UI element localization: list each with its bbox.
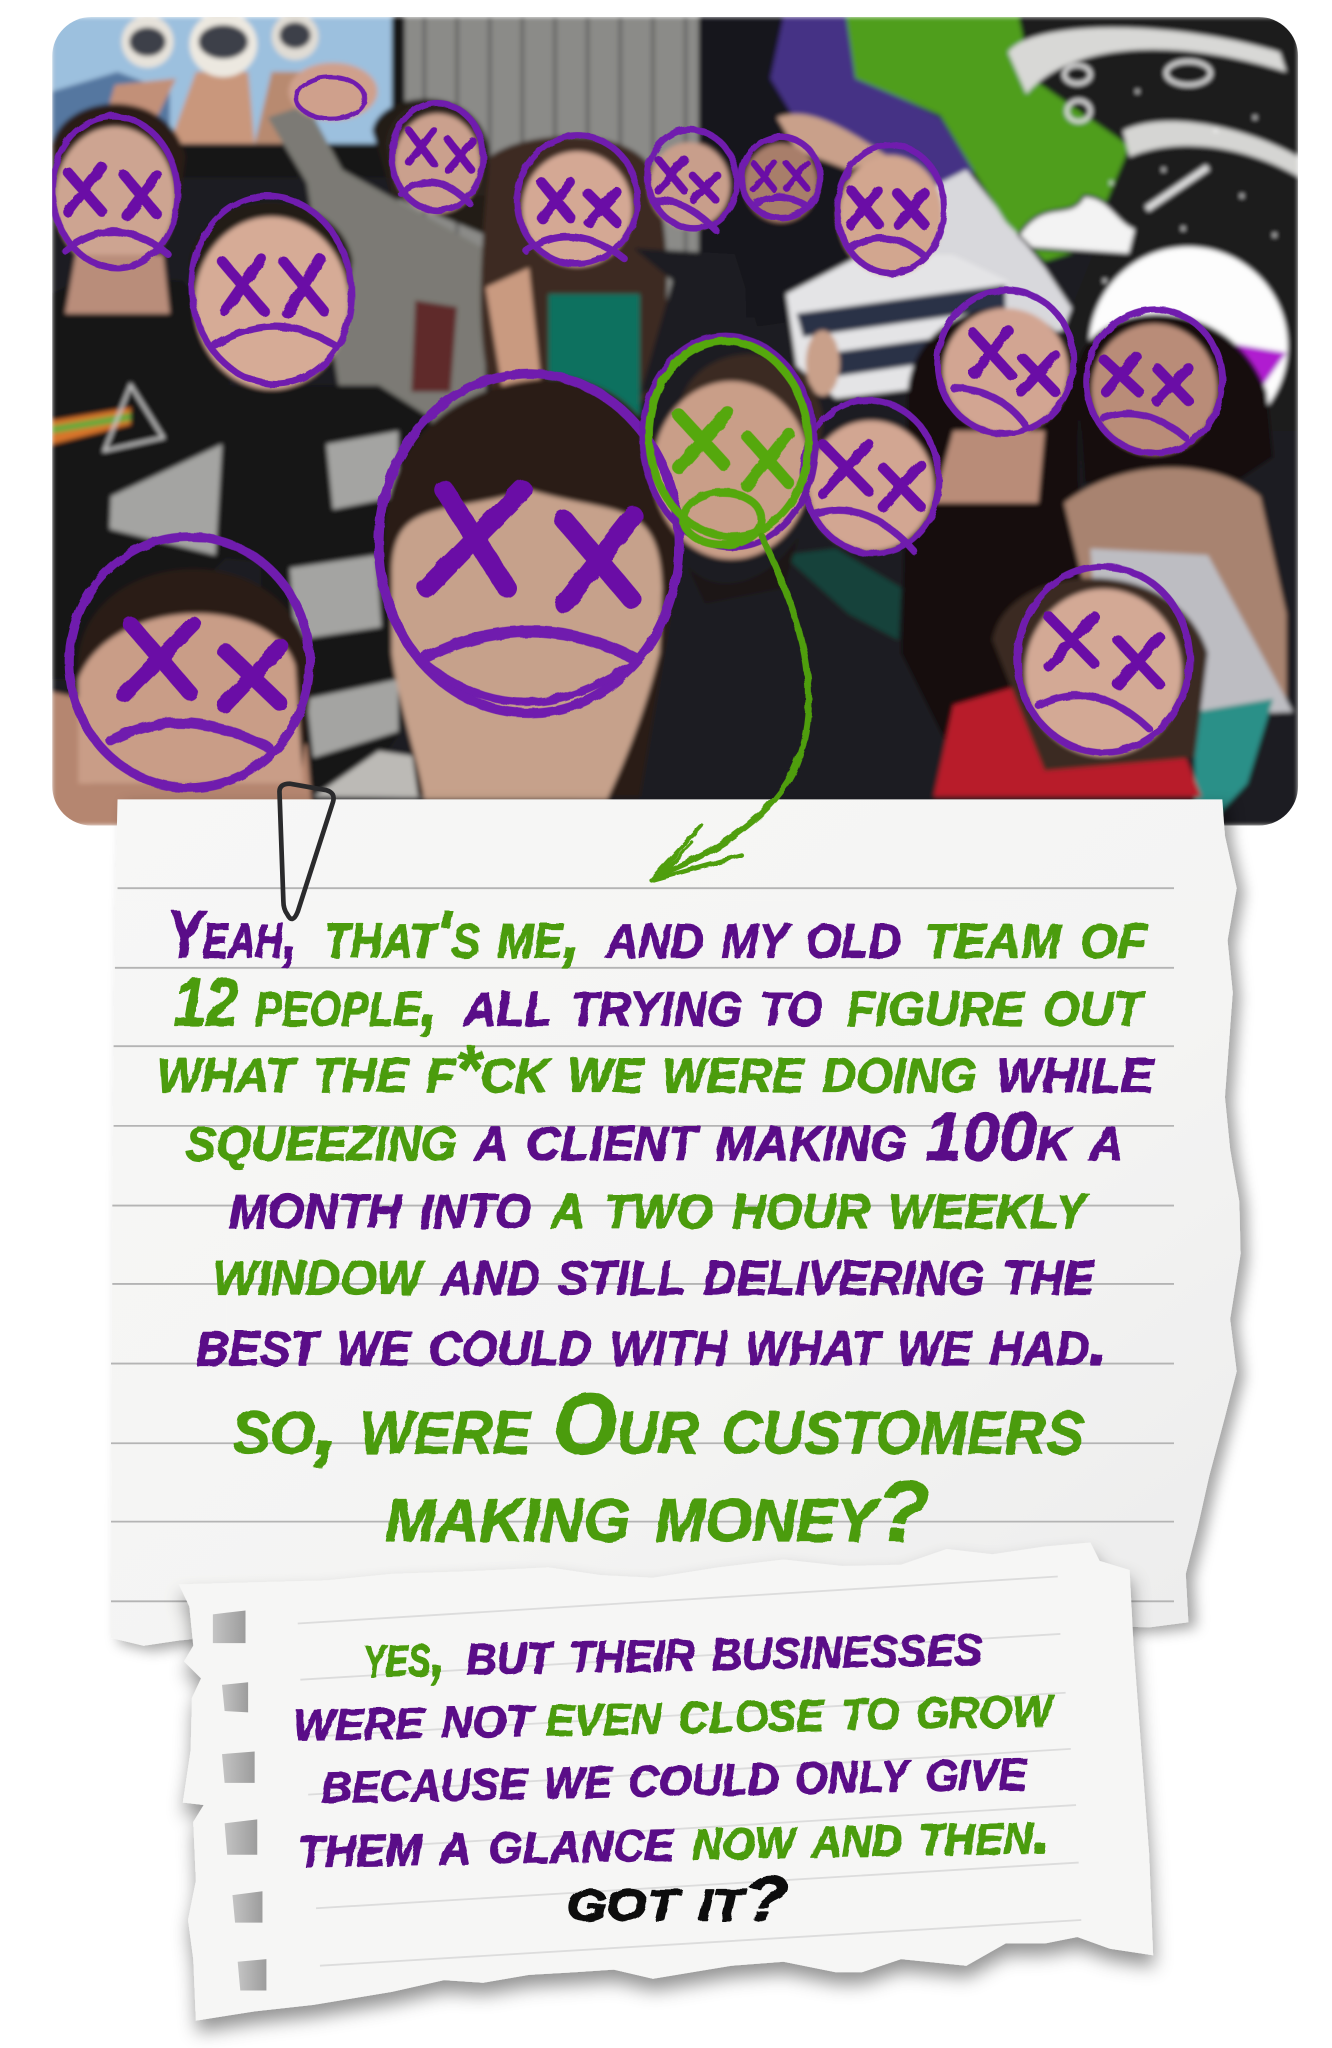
line 1: but their businesses [465,1609,982,1688]
question line 1: so, were Our customers [232,1377,1084,1473]
line 4 [185,1100,1123,1175]
punched holes [213,1610,266,1991]
line 1: and my old [605,897,901,972]
line 2: 12 people, [174,965,437,1040]
people bodies [52,274,235,679]
line 1: yes, [362,1619,445,1690]
line 6: window [213,1234,425,1309]
line 1: that's me, [324,897,580,972]
line 1: Yeah, [167,897,298,972]
torn notepaper: second note [179,1543,1153,2021]
line 4: now and then. [691,1797,1050,1874]
line 3: while [996,1032,1155,1107]
second note text [293,1609,1056,1934]
line 2: even close to grow [545,1670,1056,1750]
line 4 [297,1797,1050,1881]
line 2: all trying to [463,965,823,1040]
photo: team selfie with doodled faces [47,12,1298,825]
line 4: them a glance [297,1804,676,1881]
line 4: a client making 100k a [473,1100,1123,1175]
ruled lines [111,888,1174,1601]
line 2 [174,965,1146,1040]
line 5: month into [229,1168,531,1243]
line 2 [293,1670,1056,1754]
question line 2: making money? [385,1464,930,1560]
line 3: what the f*ck we were doing [157,1032,977,1107]
line 6: and still delivering the [439,1234,1096,1309]
doodle: purple dead faces [47,77,1228,788]
icon: paper clip [279,784,334,919]
line 2: figure out [846,965,1146,1040]
skin tones of faces [55,127,175,270]
main note text [157,897,1155,1560]
line 1 [167,897,1148,972]
doodle: green dead face [634,329,824,554]
got it: got it? [567,1864,789,1934]
line 3: because we could only give [320,1733,1028,1817]
line 7: best we could with what we had. [196,1305,1107,1380]
torn notepaper: main note [111,799,1241,1646]
arrow: from green face to note [652,536,809,880]
line 2: were not [293,1680,536,1754]
line 5 [229,1168,1090,1243]
ruled lines [298,1576,1081,1966]
line 1: team of [925,897,1148,972]
line 5: a two hour weekly [550,1168,1090,1243]
TV with astronaut picture [52,12,405,178]
line 4: squeezing [185,1100,457,1175]
